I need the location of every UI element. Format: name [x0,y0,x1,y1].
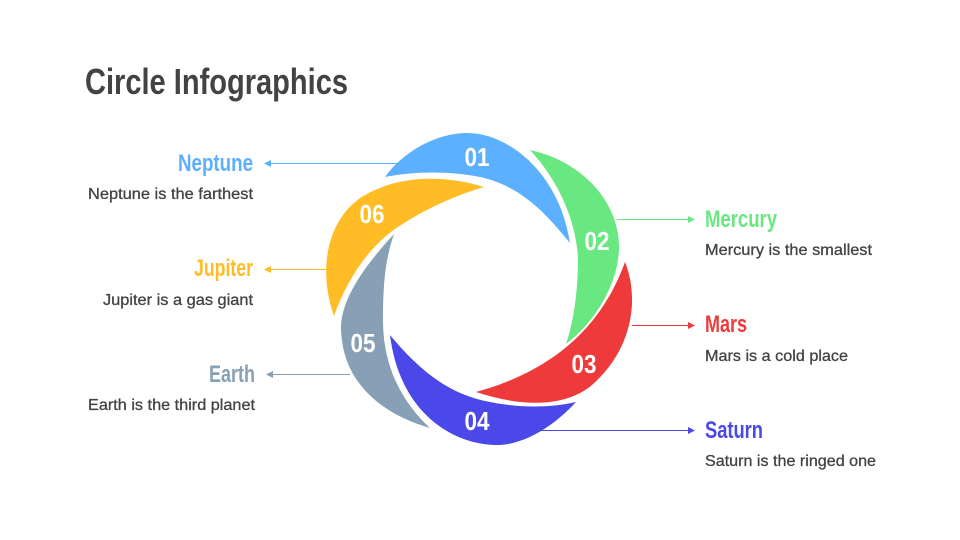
title: Circle Infographics [85,61,348,102]
circle diagram [326,133,632,445]
label: Mars: Mars is a cold place [705,348,848,365]
segment 02: Mercury [530,150,619,344]
label: Mercury: Mercury is the smallest [705,242,873,259]
segment 06: Jupiter [326,179,484,316]
arrow: Mars [632,322,695,329]
label: Earth [88,361,256,414]
arrow: Earth [266,371,350,378]
label: Earth: Earth is the third planet [88,397,256,414]
segment 03: Mars: 03 [572,349,596,379]
segment 02: Mercury: 02 [584,226,610,256]
segment 01: Neptune: 01 [464,142,490,172]
segment 01: Neptune [385,133,570,243]
label: Jupiter [103,255,254,309]
arrow: Neptune [264,160,400,167]
label: Saturn: Saturn is the ringed one [705,453,876,470]
label: Jupiter: Jupiter [194,255,253,282]
arrow: Mercury [617,216,695,223]
label: Mercury: Mercury [705,206,778,233]
segment 04: Saturn: 04 [464,406,490,436]
segment 05: Earth: 05 [350,328,376,358]
label: Saturn [705,417,876,470]
label: Saturn: Saturn [705,417,763,444]
arrow: Jupiter [264,266,327,273]
label: Jupiter: Jupiter is a gas giant [103,292,254,309]
label: Neptune [88,150,254,203]
segment 04: Saturn [390,335,576,445]
label: Earth: Earth [209,361,255,388]
segment 05: Earth [341,234,430,428]
arrow: Saturn [540,427,695,434]
label: Mars [705,311,848,365]
label: Neptune: Neptune [178,150,253,177]
label: Neptune: Neptune is the farthest [88,186,254,203]
segment 03: Mars [476,262,632,403]
label: Mars: Mars [705,311,747,338]
label: Mercury [705,206,873,259]
segment 06: Jupiter: 06 [360,199,384,229]
